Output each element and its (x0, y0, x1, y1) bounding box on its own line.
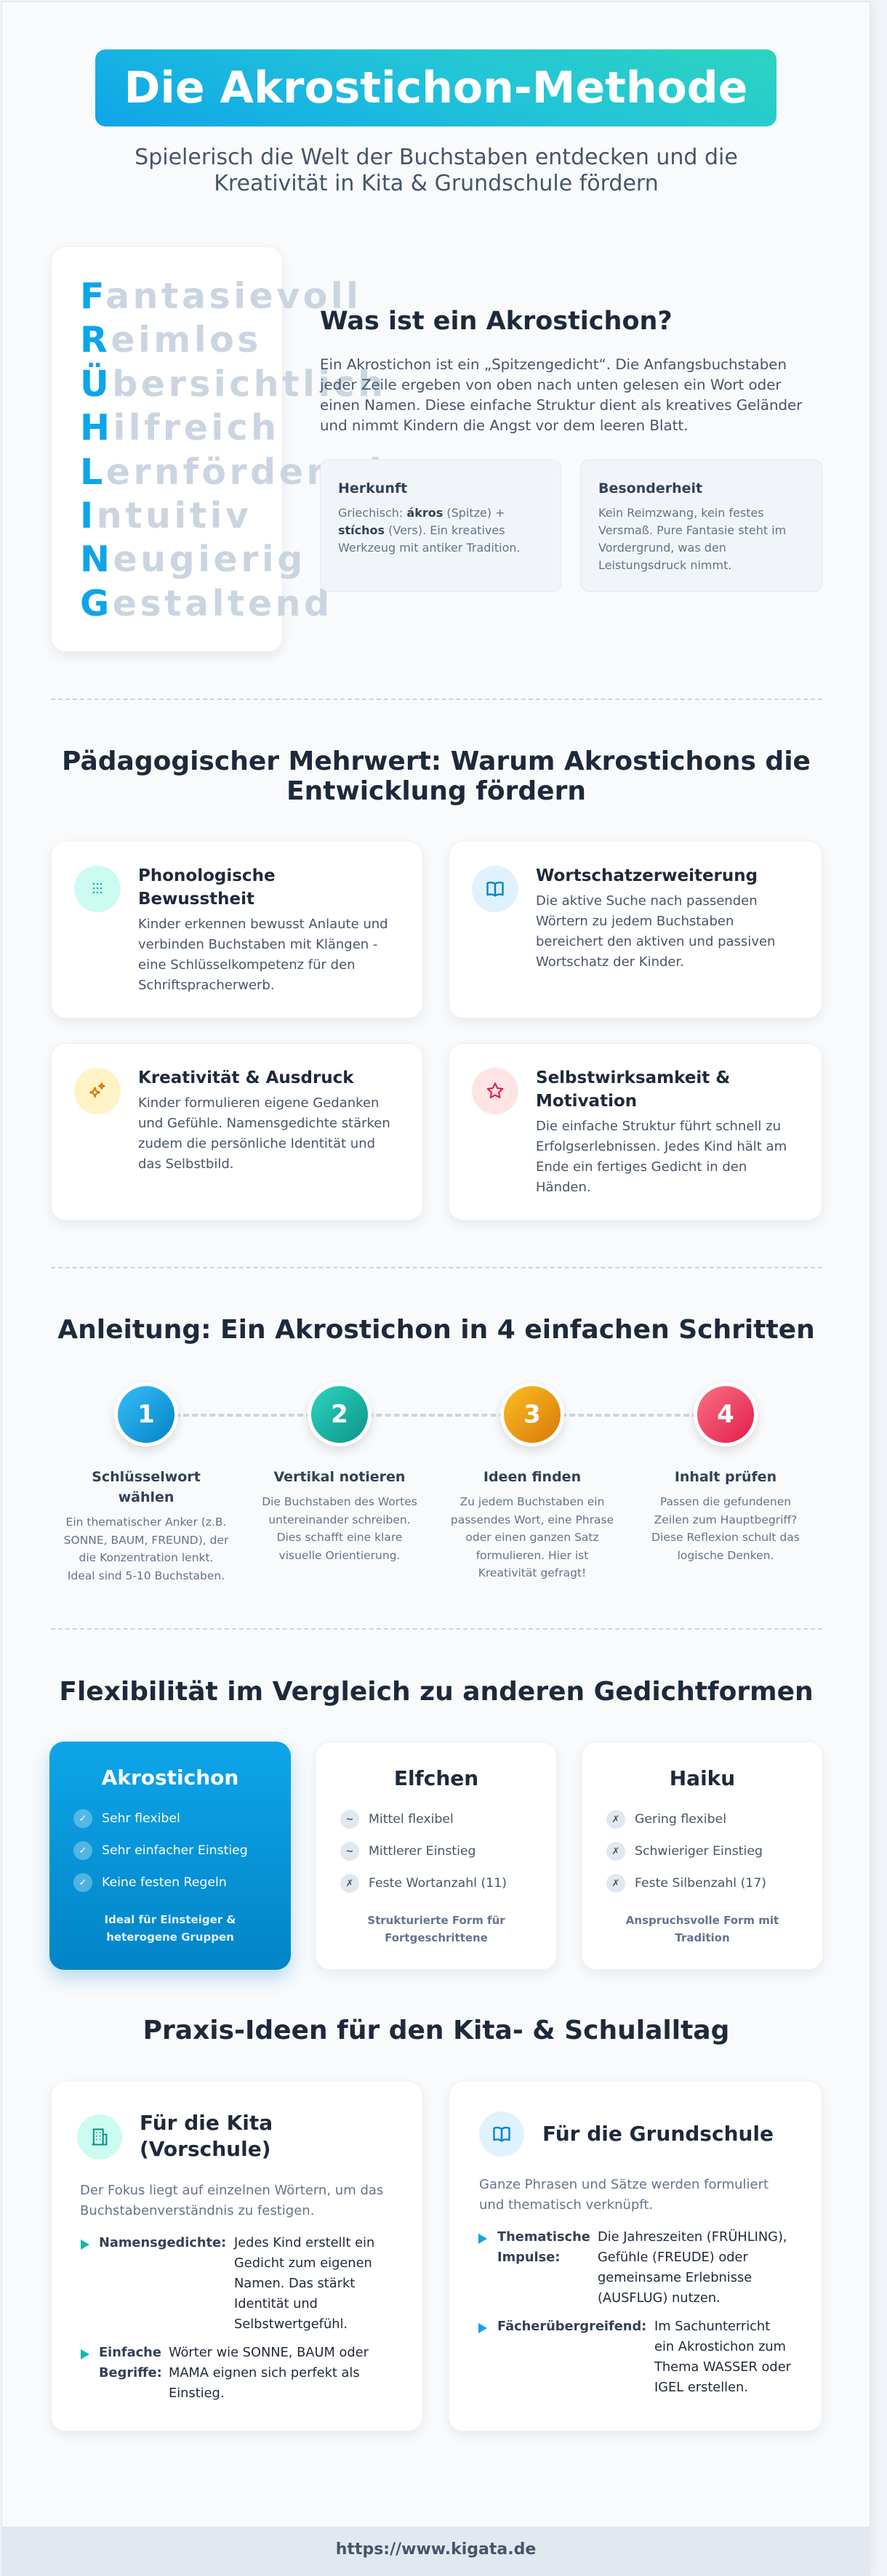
card text: zudem die persönliche Identität und (138, 1136, 375, 1151)
step 1 text: Ein thematischer Anker (z.B. (66, 1516, 226, 1529)
card text: Phonologische (138, 866, 276, 885)
connector dashed line (174, 1414, 698, 1417)
step 2 circle (308, 1382, 372, 1446)
description (80, 2183, 383, 2218)
icon: sparkles (74, 1068, 121, 1114)
step 3 circle (500, 1382, 564, 1446)
comparison card: Elfchen: Mittlerer Einstieg (369, 1844, 476, 1859)
icon: book (472, 866, 518, 912)
icon: book (479, 2112, 524, 2157)
step 4 text (651, 1469, 800, 1561)
comparison card: Haiku: Schwieriger Einstieg (635, 1844, 763, 1859)
comparison card: Elfchen (316, 1742, 557, 1970)
info box: Besonderheit: Vordergrund, was den (598, 541, 726, 555)
bullet: Einfache Begriffe: MAMA eignen sich perfekt als (169, 2365, 360, 2380)
bullet: Einfache Begriffe: Einfache (99, 2345, 161, 2360)
card text: Kreativität & Ausdruck (138, 1068, 354, 1087)
card text (536, 866, 775, 970)
comparison card: Akrostichon: Keine festen Regeln (102, 1875, 227, 1890)
heading: Flexibilität: Flexibilität im Vergleich zu anderen Gedichtformen (59, 1677, 814, 1707)
step 2 text: Dies schafft eine klare (277, 1531, 402, 1544)
card text (138, 1068, 390, 1172)
panel: Kita (51, 2081, 423, 2431)
step 2 text: Vertikal notieren (274, 1469, 405, 1485)
description: Buchstabenverständnis zu festigen. (80, 2203, 314, 2218)
bullet: Namensgedichte: Identität und (234, 2296, 318, 2311)
icon: dots (74, 866, 121, 912)
bullet: Namensgedichte: Jedes Kind erstellt ein (234, 2235, 374, 2250)
acrostic words: Intuitiv (80, 495, 252, 536)
comparison card: Haiku: Haiku (670, 1766, 735, 1790)
footer (1, 2527, 870, 2576)
comparison card: Elfchen: Mittel flexibel (369, 1812, 454, 1827)
card text: eine Schlüsselkompetenz für den (138, 957, 356, 973)
step 2 text: Die Buchstaben des Wortes (262, 1495, 417, 1508)
info box: Herkunft (320, 459, 561, 592)
card: Phonologische Bewusstheit (51, 841, 423, 1018)
step 3 circle: 3 (523, 1400, 541, 1429)
comparison card: Haiku (582, 1742, 823, 1970)
step 1 circle (114, 1382, 178, 1446)
text block: definition: Ein Akrostichon ist ein „Spitzengedicht“. Die Anfangsbuchstaben (320, 356, 787, 373)
comparison card: Elfchen: Strukturierte Form für (367, 1914, 505, 1927)
step 3 text: formulieren. Hier ist (476, 1548, 588, 1561)
title banner (95, 49, 776, 126)
comparison card: Haiku: ✗ (612, 1878, 619, 1888)
text block: definition: und nimmt Kindern die Angst vor dem leeren Blatt. (320, 417, 688, 434)
panel: acrostic example FRÜHLING (51, 246, 387, 656)
comparison card: Akrostichon: ✓ (79, 1845, 87, 1856)
title banner: Die Akrostichon-Methode (124, 63, 747, 113)
bullet: Thematische Impulse: (AUSFLUG) nutzen. (598, 2290, 721, 2306)
description: Ganze Phrasen und Sätze werden formuliert (479, 2177, 768, 2192)
step 1 text: wählen (119, 1489, 174, 1505)
card text (536, 1068, 787, 1195)
acrostic words (80, 275, 387, 624)
card text: und Gefühle. Namensgedichte stärken (138, 1116, 390, 1131)
card text: verbinden Buchstaben mit Klängen - (138, 937, 377, 952)
step 4 circle (694, 1382, 758, 1446)
card text: bereichert den aktiven und passiven (536, 934, 775, 949)
step 1 text: Schlüsselwort (92, 1469, 201, 1485)
comparison card: Akrostichon (49, 1742, 291, 1970)
card: Wortschatzerweiterung (449, 841, 822, 1018)
comparison card: Elfchen: ✗ (346, 1878, 353, 1888)
step 3 text: Ideen finden (483, 1469, 581, 1485)
icon: star (472, 1068, 518, 1114)
step 1 text (64, 1469, 228, 1582)
step 1 text: die Konzentration lenkt. (79, 1551, 214, 1564)
card: Selbstwirksamkeit & Motivation (449, 1043, 822, 1220)
bullet: Thematische Impulse: Thematische (497, 2229, 590, 2245)
bullet: Thematische Impulse: gemeinsame Erlebnisse (598, 2270, 752, 2285)
footer: https://www.kigata.de (336, 2540, 536, 2559)
card text: Wörtern zu jedem Buchstaben (536, 914, 734, 929)
acrostic words: Gestaltend (80, 583, 333, 624)
acrostic words: Lernfördernd (80, 451, 385, 493)
info box: Besonderheit (580, 459, 822, 592)
bullet: Namensgedichte: Namensgedichte: (99, 2235, 226, 2250)
title: (Vorschule) (140, 2137, 270, 2161)
card text: Wortschatz der Kinder. (536, 954, 684, 970)
heading: Praxis-Ideen: Praxis-Ideen für den Kita- & Schulalltag (143, 2016, 729, 2045)
card text: Kinder formulieren eigene Gedanken (138, 1095, 379, 1111)
title: Für die Grundschule (542, 2122, 774, 2146)
card text: Bewusstheit (138, 890, 254, 909)
card text: Selbstwirksamkeit & (536, 1068, 730, 1087)
bullet: Fächerübergreifend: ein Akrostichon zum (654, 2339, 786, 2354)
heading: Pädagogischer Mehrwert: Entwicklung fördern (286, 776, 586, 806)
acrostic words: Hilfreich (80, 407, 280, 448)
subtitle: Spielerisch die Welt der Buchstaben entdecken und die (135, 145, 738, 170)
step 3 text: Zu jedem Buchstaben ein (460, 1495, 604, 1508)
info box: Besonderheit: Kein Reimzwang, kein festes (598, 506, 764, 520)
comparison card: Haiku: Tradition (675, 1931, 730, 1944)
bullet: Thematische Impulse: Gefühle (FREUDE) oder (598, 2250, 748, 2265)
acrostic words: Reimlos (80, 319, 262, 361)
card text: Schriftspracherwerb. (138, 978, 275, 993)
comparison card: Akrostichon: Akrostichon (102, 1766, 238, 1790)
comparison card: Elfchen: Fortgeschrittene (385, 1931, 488, 1944)
comparison card: Haiku: ✗ (612, 1846, 619, 1856)
bullet: Einfache Begriffe: Wörter wie SONNE, BAUM oder (169, 2345, 369, 2360)
heading: Anleitung: Anleitung: Ein Akrostichon in 4 einfachen Schritten (57, 1315, 815, 1345)
comparison card: Akrostichon: Sehr flexibel (102, 1811, 180, 1826)
bullet: Einfache Begriffe (81, 2345, 369, 2401)
bullet: Einfache Begriffe: Einstieg. (169, 2386, 224, 2401)
step 3 text (451, 1469, 614, 1579)
panel: Grundschule (449, 2081, 822, 2431)
card text: Ende ein fertiges Gedicht in den (536, 1159, 747, 1175)
bullet: Thematische Impulse (478, 2229, 787, 2306)
comparison card: Haiku: Gering flexibel (635, 1812, 726, 1827)
text block: definition: jeder Zeile ergeben von oben nach unten gelesen ein Wort oder (320, 377, 782, 393)
step 4 text: Passen die gefundenen (660, 1495, 791, 1508)
card text: Kinder erkennen bewusst Anlaute und (138, 917, 388, 932)
info box: Herkunft: Griechisch: ákros (Spitze) + (338, 506, 505, 520)
step 2 text: untereinander schreiben. (268, 1513, 411, 1526)
comparison card: Haiku: ✗ (612, 1814, 619, 1824)
card text: Die aktive Suche nach passenden (536, 893, 758, 909)
bullet: Fächerübergreifend: Im Sachunterricht (654, 2319, 770, 2334)
step 1 circle: 1 (137, 1400, 155, 1429)
step 3 text: passendes Wort, eine Phrase (451, 1513, 614, 1526)
bullet: Fächerübergreifend: Fächerübergreifend: (497, 2319, 646, 2334)
card text: Händen. (536, 1180, 591, 1195)
step 3 text: Kreativität gefragt! (478, 1566, 586, 1579)
step 2 circle: 2 (331, 1400, 348, 1429)
title (140, 2111, 273, 2161)
comparison card: Akrostichon: ✓ (79, 1877, 87, 1888)
bullet: Thematische Impulse: Impulse: (497, 2250, 560, 2265)
description: Der Fokus liegt auf einzelnen Wörtern, um das (80, 2183, 383, 2198)
info box: Herkunft: Werkzeug mit antiker Tradition. (338, 541, 521, 555)
card text: Die einfache Struktur führt schnell zu (536, 1119, 781, 1134)
icon: building (77, 2114, 122, 2160)
comparison card: Akrostichon: Sehr einfacher Einstieg (102, 1843, 248, 1858)
info box: Besonderheit: Besonderheit (598, 480, 702, 496)
acrostic words: Fantasievoll (80, 275, 361, 317)
card text: Motivation (536, 1092, 637, 1111)
heading: Was ist ein Akrostichon: Was ist ein Akrostichon? (320, 307, 673, 336)
step 4 text: Diese Reflexion schult das (651, 1531, 800, 1544)
step 2 text: visuelle Orientierung. (279, 1548, 400, 1561)
bullet: Thematische Impulse: Die Jahreszeiten (FRÜHLING), (598, 2229, 787, 2245)
description: und thematisch verknüpft. (479, 2197, 653, 2213)
step 1 text: SONNE, BAUM, FREUND), der (64, 1534, 228, 1547)
card text: Wortschatzerweiterung (536, 866, 758, 885)
text block: definition: einen Namen. Diese einfache Struktur dient als kreatives Geländer (320, 397, 802, 414)
bullet: Fächerübergreifend: Thema WASSER oder (654, 2359, 791, 2375)
comparison card: Elfchen: ~ (346, 1846, 353, 1856)
info box: Herkunft: stíchos (Vers). Ein kreatives (338, 523, 505, 537)
comparison card: Elfchen: Feste Wortanzahl (11) (369, 1876, 507, 1891)
info box: Besonderheit: Leistungsdruck nimmt. (598, 558, 731, 572)
heading: Pädagogischer Mehrwert (62, 746, 811, 806)
heading: Pädagogischer Mehrwert: Pädagogischer Mehrwert: Warum Akrostichons die (62, 746, 811, 776)
title: Für die Kita (140, 2111, 273, 2135)
comparison card: Haiku: Anspruchsvolle Form mit (626, 1914, 779, 1927)
info box: Herkunft: Herkunft (338, 480, 407, 496)
step 1 text: Ideal sind 5-10 Buchstaben. (68, 1569, 225, 1582)
card text: Erfolgserlebnissen. Jedes Kind hält am (536, 1139, 787, 1154)
step 2 text (262, 1469, 417, 1561)
comparison card: Akrostichon: Ideal für Einsteiger & (105, 1913, 236, 1926)
comparison card: Haiku: Feste Silbenzahl (17) (635, 1876, 766, 1891)
card text (138, 866, 388, 993)
step 4 circle: 4 (717, 1400, 734, 1429)
step 3 text: oder einen ganzen Satz (465, 1531, 599, 1544)
comparison card: Elfchen: Elfchen (394, 1766, 478, 1790)
step 4 text: Inhalt prüfen (675, 1469, 776, 1485)
acrostic words: Übersichtlich (80, 363, 387, 405)
acrostic words: Neugierig (80, 539, 306, 580)
bullet: Namensgedichte: Namen. Das stärkt (234, 2276, 355, 2291)
bullet: Fächerübergreifend: IGEL erstellen. (654, 2380, 748, 2395)
bullet: Einfache Begriffe: Begriffe: (99, 2365, 162, 2380)
step 4 text: logische Denken. (678, 1548, 774, 1561)
card: Kreativität & Ausdruck (51, 1043, 423, 1220)
description (479, 2177, 768, 2213)
step 4 text: Zeilen zum Hauptbegriff? (654, 1513, 797, 1526)
info box: Besonderheit: Versmaß. Pure Fantasie steht im (598, 523, 786, 537)
subtitle (135, 145, 738, 196)
text block: definition (320, 356, 803, 434)
card text: das Selbstbild. (138, 1156, 234, 1172)
comparison card: Elfchen: ~ (346, 1814, 353, 1824)
comparison card: Akrostichon: ✓ (79, 1813, 87, 1824)
comparison card: Akrostichon: heterogene Gruppen (106, 1931, 234, 1944)
bullet: Namensgedichte: Gedicht zum eigenen (234, 2255, 372, 2271)
bullet: Fächerübergreifend (478, 2319, 791, 2395)
bullet: Namensgedichte: Selbstwertgefühl. (234, 2317, 348, 2332)
bullet: Namensgedichte (81, 2235, 374, 2332)
subtitle: Kreativität in Kita & Grundschule fördern (214, 171, 659, 196)
